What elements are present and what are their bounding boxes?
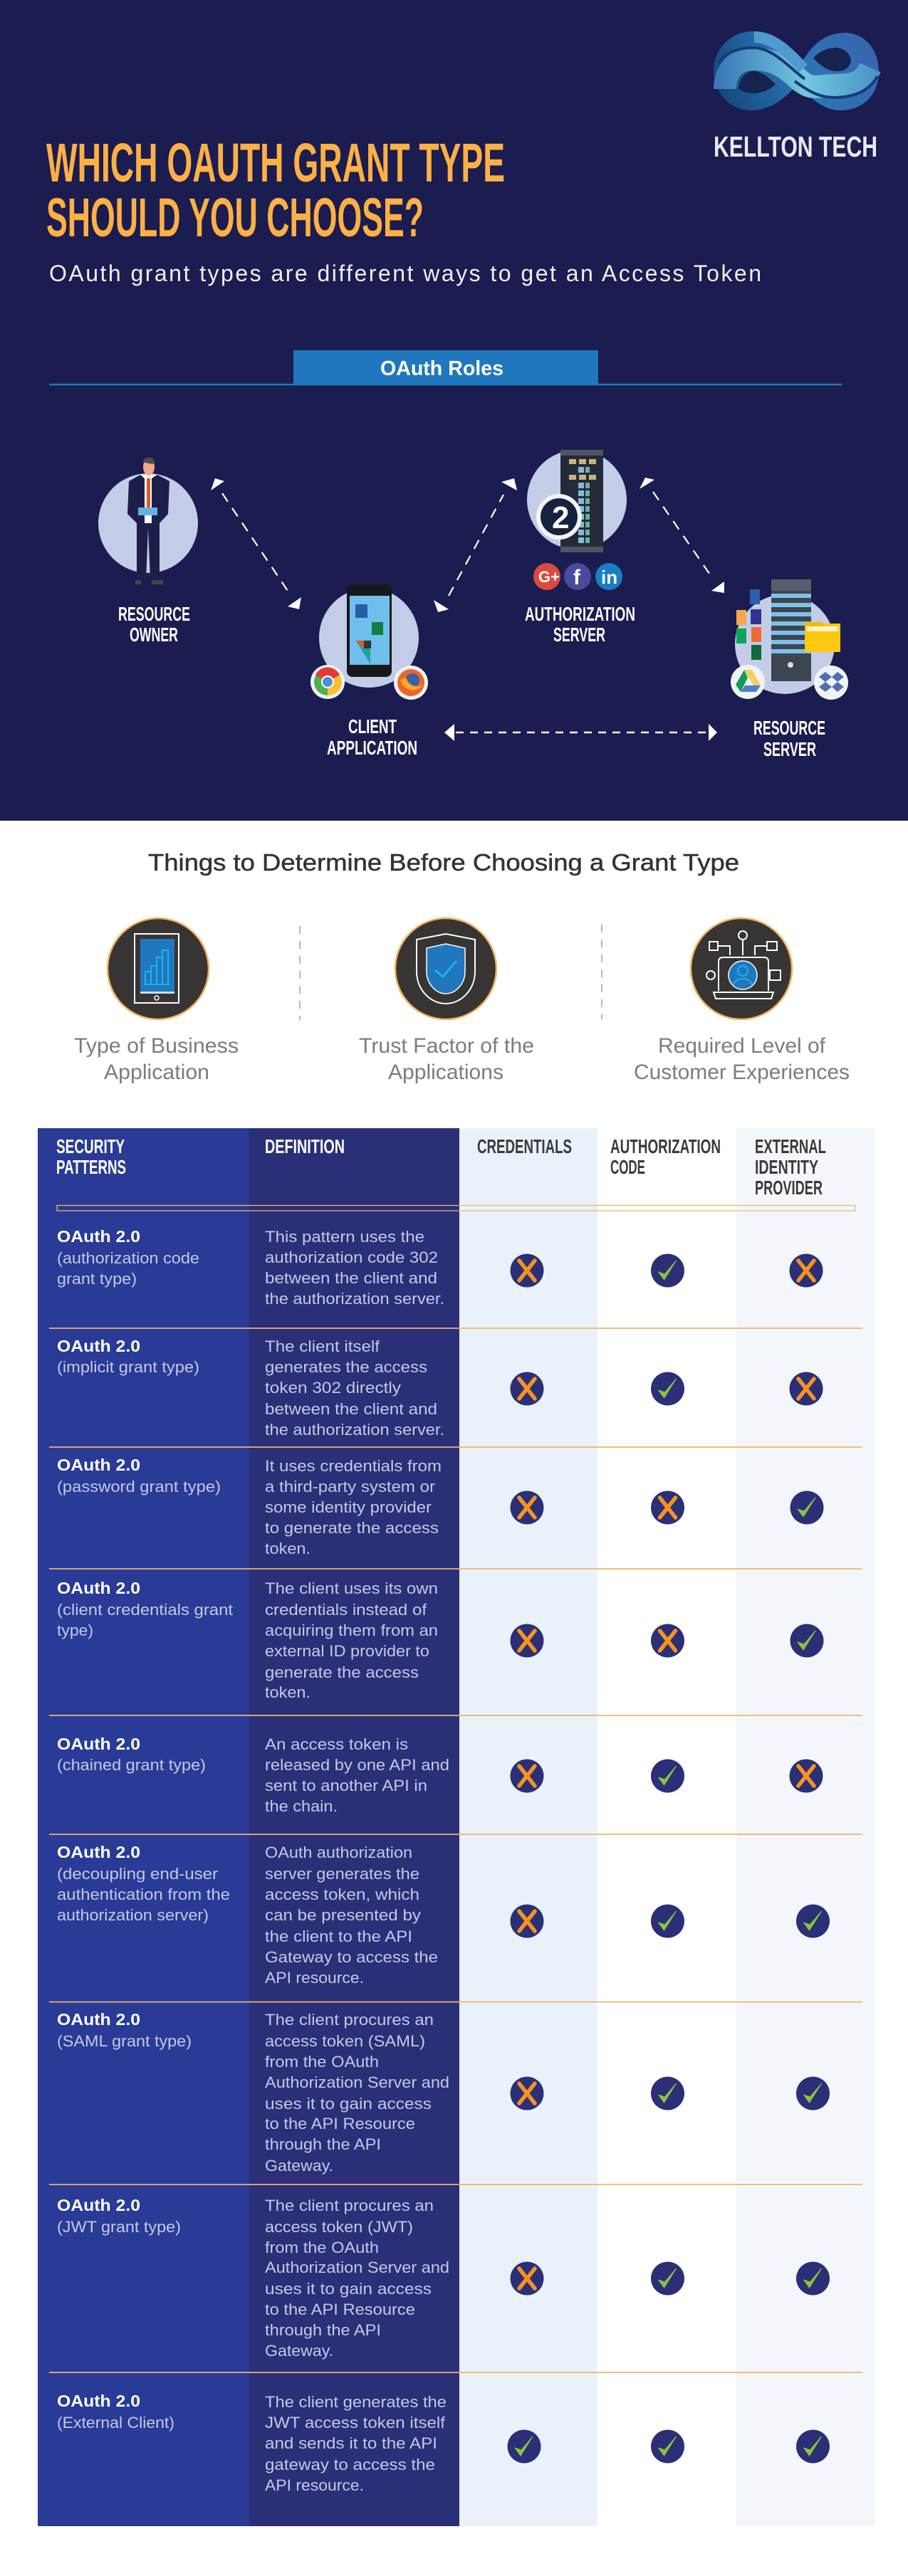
row 9: external client: (External Client)	[57, 2414, 174, 2432]
row 1: authorization code	[57, 1227, 823, 1308]
icon: check	[790, 1491, 823, 1525]
icon: cross	[789, 1372, 823, 1405]
arrow: owner to client	[211, 478, 301, 609]
row 2: implicit	[57, 1337, 823, 1439]
row 6: decoupling: authentication from the	[57, 1886, 230, 1903]
role label: resource owner: OWNER	[130, 624, 178, 646]
row 9: external client: The client generates the	[265, 2393, 447, 2411]
row 8: JWT: The client procures an	[265, 2197, 434, 2214]
role label: authorization server	[525, 603, 635, 646]
row 1: authorization code: grant type)	[57, 1270, 137, 1288]
row 1: authorization code: between the client and	[265, 1269, 437, 1287]
role: authorization server: 2	[552, 500, 569, 535]
arrow: client to authorization server	[434, 478, 517, 612]
row 7: SAML: Gateway.	[265, 2157, 333, 2175]
icon: check	[796, 2262, 830, 2295]
row 2: implicit: The client itself	[265, 1337, 380, 1355]
row 6: decoupling: access token, which	[265, 1886, 419, 1903]
row 3: password: to generate the access	[265, 1519, 439, 1537]
icon: cross	[651, 1624, 684, 1657]
role label: resource server: SERVER	[763, 738, 816, 760]
icon: business application tablet	[108, 918, 209, 1019]
role: resource server	[731, 579, 848, 700]
icon: cross	[510, 1760, 544, 1792]
row 6: decoupling	[57, 1843, 830, 1987]
title: WHICH OAUTH GRANT TYPE	[46, 132, 505, 194]
arrow: authorization server to resource server	[640, 478, 724, 593]
row 7: SAML: through the API	[265, 2135, 381, 2153]
row 2: implicit: token 302 directly	[265, 1379, 402, 1397]
label: trust factor: Applications	[388, 1061, 503, 1084]
row 8: JWT: access token (JWT)	[265, 2218, 413, 2236]
row 4: client credentials: acquiring them from an	[265, 1621, 438, 1639]
heading: OAuth Roles: OAuth Roles	[380, 357, 503, 380]
arrow: client to resource server	[444, 724, 717, 741]
heading: OAuth Roles	[49, 350, 842, 386]
icon: check	[796, 1905, 830, 1938]
icon: check	[651, 2430, 684, 2463]
icon: Facebook	[564, 563, 591, 590]
role label: resource server: RESOURCE	[753, 717, 825, 739]
row 2: implicit: the authorization server.	[265, 1421, 444, 1439]
icon: cross	[510, 1254, 544, 1287]
row 3: password: a third-party system or	[265, 1478, 436, 1495]
icon: cross	[510, 1491, 544, 1525]
icon: Google Plus	[533, 563, 560, 590]
row 8: JWT: from the OAuth	[265, 2239, 379, 2256]
row 4: client credentials: generate the access	[265, 1663, 419, 1681]
row 2: implicit: between the client and	[265, 1400, 437, 1418]
icon: cross	[510, 1372, 544, 1405]
row 8: JWT: (JWT grant type)	[57, 2218, 181, 2236]
row 3: password: (password grant type)	[57, 1478, 221, 1495]
row 5: chained: released by one API and	[265, 1756, 449, 1774]
role: resource owner	[98, 457, 198, 584]
icon: cross	[651, 1491, 684, 1525]
row 8: JWT: uses it to gain access	[265, 2280, 432, 2298]
role: authorization server	[527, 450, 627, 590]
icon: check	[651, 2077, 684, 2110]
label: customer experience: Customer Experiences	[634, 1061, 850, 1084]
role label: client application	[327, 715, 417, 759]
row 5: chained: An access token is	[265, 1735, 408, 1753]
icon: trust shield	[395, 918, 496, 1019]
table header: CODE	[610, 1156, 645, 1178]
icon: check	[790, 1624, 823, 1657]
icon: cross	[510, 1905, 544, 1938]
table header: IDENTITY	[755, 1156, 818, 1178]
label: trust factor: Trust Factor of the	[359, 1034, 534, 1058]
row 3: password: token.	[265, 1540, 311, 1557]
table header: PROVIDER	[755, 1177, 823, 1199]
icon: check	[796, 2077, 830, 2110]
row 1: authorization code: (authorization code	[57, 1249, 199, 1267]
row 6: decoupling: (decoupling end-user	[57, 1865, 219, 1883]
role label: resource owner	[118, 603, 190, 646]
title	[46, 132, 505, 248]
row 6: decoupling: OAuth 2.0	[57, 1843, 140, 1861]
icon: cross	[789, 1254, 823, 1287]
row 4: client credentials: external ID provider to	[265, 1642, 429, 1660]
label: type of business application	[74, 1034, 239, 1084]
row 8: JWT: OAuth 2.0	[57, 2196, 140, 2214]
row 4: client credentials: The client uses its own	[265, 1579, 438, 1597]
role label: resource owner: RESOURCE	[118, 603, 190, 625]
icon: Facebook: f	[573, 566, 581, 589]
role: client application	[311, 584, 428, 700]
row 7: SAML: to the API Resource	[265, 2115, 415, 2133]
heading: things to determine: Things to Determine Before Choosing a Grant Type	[148, 849, 739, 876]
divider label	[299, 926, 301, 1020]
subtitle: OAuth grant types are different ways to get an Access Token	[49, 261, 761, 286]
row 3: password: It uses credentials from	[265, 1457, 442, 1475]
icon: check	[651, 1760, 684, 1792]
row 4: client credentials: OAuth 2.0	[57, 1579, 140, 1597]
row 1: authorization code: This pattern uses the	[265, 1228, 424, 1246]
row 5: chained: the chain.	[265, 1797, 338, 1815]
panel: comparison table	[38, 1128, 875, 2526]
icon: check	[507, 2430, 541, 2463]
table header: PATTERNS	[56, 1156, 126, 1178]
table header: EXTERNAL	[755, 1135, 826, 1157]
label: type of business application: Application	[104, 1061, 209, 1084]
icon: Google Plus: G+	[538, 568, 560, 586]
panel: dark header background	[0, 0, 908, 821]
icon: customer experience	[691, 918, 792, 1019]
row 8: JWT: through the API	[265, 2321, 381, 2339]
table header: SECURITY	[56, 1135, 125, 1157]
icon: cross	[510, 2262, 544, 2295]
row 6: decoupling: authorization server)	[57, 1906, 209, 1924]
row 9: external client: OAuth 2.0	[57, 2392, 140, 2410]
row 4: client credentials	[57, 1579, 823, 1701]
row 5: chained: sent to another API in	[265, 1777, 427, 1794]
icon: LinkedIn	[595, 563, 622, 590]
role label: authorization server: SERVER	[553, 624, 605, 646]
row 8: JWT: Authorization Server and	[265, 2259, 449, 2276]
divider label	[601, 925, 602, 1019]
icon: check	[651, 1254, 684, 1287]
icon: LinkedIn: in	[601, 567, 617, 588]
table header: CREDENTIALS	[477, 1135, 572, 1157]
row 1: authorization code: OAuth 2.0	[57, 1227, 140, 1246]
row 8: JWT: Gateway.	[265, 2342, 333, 2360]
row 7: SAML: uses it to gain access	[265, 2095, 432, 2113]
row 9: external client: API resource.	[265, 2476, 364, 2494]
row 9: external client: and sends it to the API	[265, 2434, 437, 2452]
row 1: authorization code: authorization code 302	[265, 1248, 438, 1266]
icon: check	[651, 2262, 684, 2295]
row 6: decoupling: the client to the API	[265, 1928, 412, 1945]
row 9: external client: gateway to access the	[265, 2456, 435, 2474]
row 4: client credentials: type)	[57, 1621, 93, 1639]
row 7: SAML: access token (SAML)	[265, 2032, 425, 2050]
logo: Kellton Tech	[714, 31, 879, 163]
icon: cross	[510, 2077, 544, 2110]
row 9: external client	[57, 2392, 830, 2494]
row 6: decoupling: Gateway to access the	[265, 1948, 438, 1966]
role label: client application: APPLICATION	[327, 737, 417, 759]
label: type of business application: Type of Business	[74, 1034, 239, 1058]
row 6: decoupling: OAuth authorization	[265, 1844, 412, 1861]
row 3: password	[57, 1456, 823, 1557]
title: SHOULD YOU CHOOSE?	[46, 187, 424, 248]
icon: check	[651, 1905, 684, 1938]
row 6: decoupling: can be presented by	[265, 1906, 422, 1924]
row 2: implicit: (implicit grant type)	[57, 1358, 199, 1376]
row 4: client credentials: (client credentials grant	[57, 1601, 234, 1619]
role label: authorization server: AUTHORIZATION	[525, 603, 635, 625]
icon: cross	[789, 1760, 823, 1792]
row 7: SAML: from the OAuth	[265, 2053, 379, 2071]
row 7: SAML	[57, 2010, 830, 2175]
row 4: client credentials: credentials instead of	[265, 1601, 427, 1619]
label: customer experience: Required Level of	[658, 1034, 826, 1058]
row 4: client credentials: token.	[265, 1683, 311, 1701]
row 6: decoupling: server generates the	[265, 1865, 419, 1883]
icon: cross	[510, 1624, 544, 1657]
row 8: JWT	[57, 2196, 830, 2360]
icon: check	[796, 2430, 830, 2463]
table header	[56, 1135, 826, 1199]
row 7: SAML: The client procures an	[265, 2011, 434, 2029]
row 5: chained	[57, 1735, 823, 1815]
table header: DEFINITION	[265, 1135, 345, 1157]
row 1: authorization code: the authorization server.	[265, 1290, 444, 1308]
row 3: password: OAuth 2.0	[57, 1456, 140, 1474]
row 7: SAML: OAuth 2.0	[57, 2010, 140, 2029]
row 5: chained: (chained grant type)	[57, 1756, 206, 1774]
row 3: password: some identity provider	[265, 1498, 432, 1516]
row 8: JWT: to the API Resource	[265, 2301, 415, 2318]
row 2: implicit: generates the access	[265, 1358, 427, 1376]
label: customer experience	[634, 1034, 850, 1084]
icon: check	[651, 1372, 684, 1405]
row 6: decoupling: API resource.	[265, 1969, 364, 1987]
row 7: SAML: (SAML grant type)	[57, 2032, 192, 2050]
row 9: external client: JWT access token itself	[265, 2414, 446, 2432]
role label: client application: CLIENT	[348, 715, 397, 737]
role label: resource server	[753, 717, 825, 760]
row 5: chained: OAuth 2.0	[57, 1735, 140, 1753]
label: trust factor	[359, 1034, 534, 1084]
table header: AUTHORIZATION	[610, 1135, 721, 1157]
row 2: implicit: OAuth 2.0	[57, 1337, 140, 1355]
row 7: SAML: Authorization Server and	[265, 2073, 449, 2091]
